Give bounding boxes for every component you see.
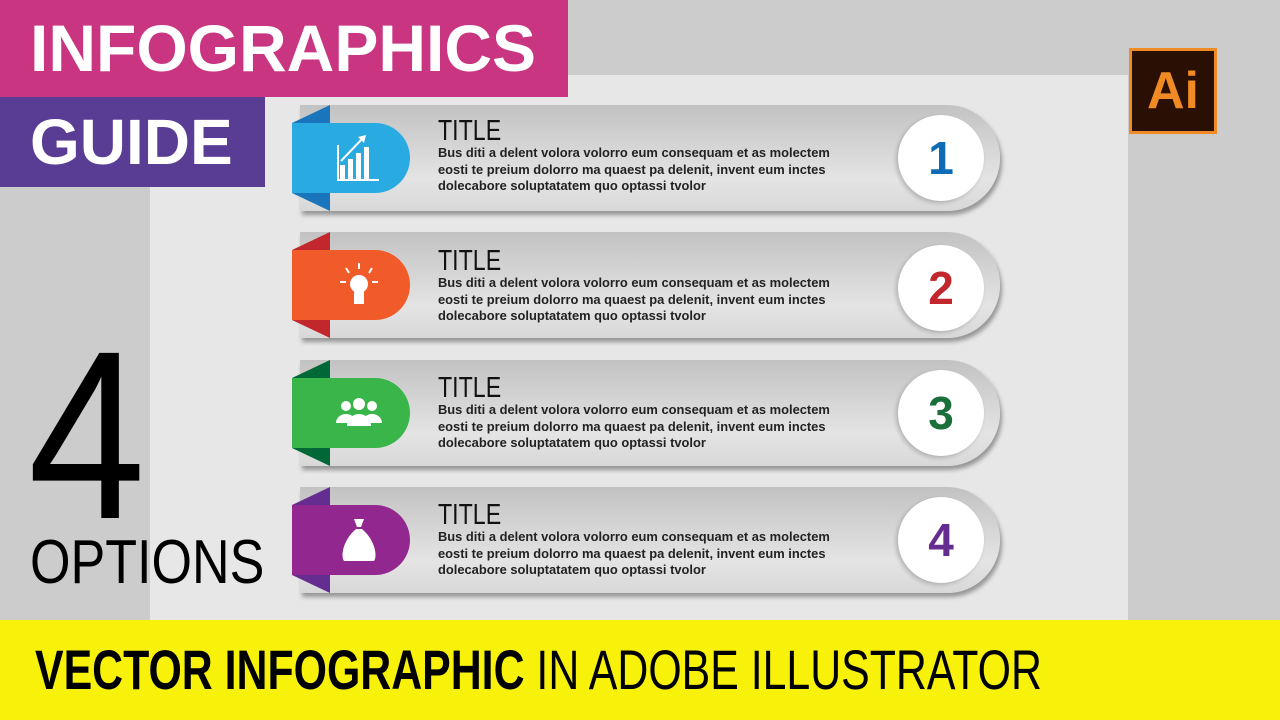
- card 2: [292, 232, 1004, 345]
- card 1: Bus diti a delent volora volorro eum consequam et as molectem: [438, 145, 830, 160]
- card 3: TITLE: [438, 372, 501, 404]
- banner: infographics: INFOGRAPHICS: [30, 11, 536, 85]
- icon: adobe illustrator: [1129, 48, 1217, 134]
- card 2: TITLE: [438, 245, 501, 277]
- card 2: Bus diti a delent volora volorro eum consequam et as molectem: [438, 275, 830, 290]
- card 4: 4: [928, 514, 954, 566]
- icon: adobe illustrator: Ai: [1147, 62, 1199, 120]
- banner: infographics: [0, 0, 568, 97]
- card 1: 1: [928, 132, 954, 184]
- options label: OPTIONS: [30, 528, 264, 597]
- card 2: 2: [928, 262, 954, 314]
- card 4: [292, 487, 1004, 600]
- card 3: Bus diti a delent volora volorro eum consequam et as molectem: [438, 402, 830, 417]
- icon: people: [292, 378, 410, 448]
- footer text: VECTOR INFOGRAPHIC IN ADOBE ILLUSTRATOR: [35, 638, 1042, 701]
- icon: money bag: [292, 505, 410, 575]
- card 4: TITLE: [438, 499, 501, 531]
- icon: bulb: [292, 250, 410, 320]
- card 2: eosti te preium dolorro ma quaest pa delenit, invent eum inctes: [438, 292, 826, 306]
- footer banner: [0, 620, 1280, 720]
- icon: chart: [292, 123, 410, 193]
- card 1: [292, 105, 1004, 218]
- card 4: Bus diti a delent volora volorro eum consequam et as molectem: [438, 529, 830, 544]
- banner: guide: [0, 97, 265, 187]
- card 1: TITLE: [438, 115, 501, 147]
- card 1: eosti te preium dolorro ma quaest pa delenit, invent eum inctes: [438, 162, 826, 176]
- big number 4: 4: [28, 301, 145, 569]
- card 2: dolecabore soluptatatem quo optassi tvolor: [438, 308, 706, 323]
- card 3: eosti te preium dolorro ma quaest pa delenit, invent eum inctes: [438, 418, 826, 434]
- card 3: dolecabore soluptatatem quo optassi tvolor: [438, 435, 706, 450]
- card 3: [292, 360, 1004, 473]
- card 1: dolecabore soluptatatem quo optassi tvolor: [438, 178, 706, 193]
- card 4: eosti te preium dolorro ma quaest pa delenit, invent eum inctes: [438, 546, 826, 560]
- background panel: [150, 75, 1128, 620]
- card 4: dolecabore soluptatatem quo optassi tvolor: [438, 562, 706, 577]
- banner: guide: GUIDE: [30, 106, 233, 178]
- card 3: 3: [928, 387, 954, 439]
